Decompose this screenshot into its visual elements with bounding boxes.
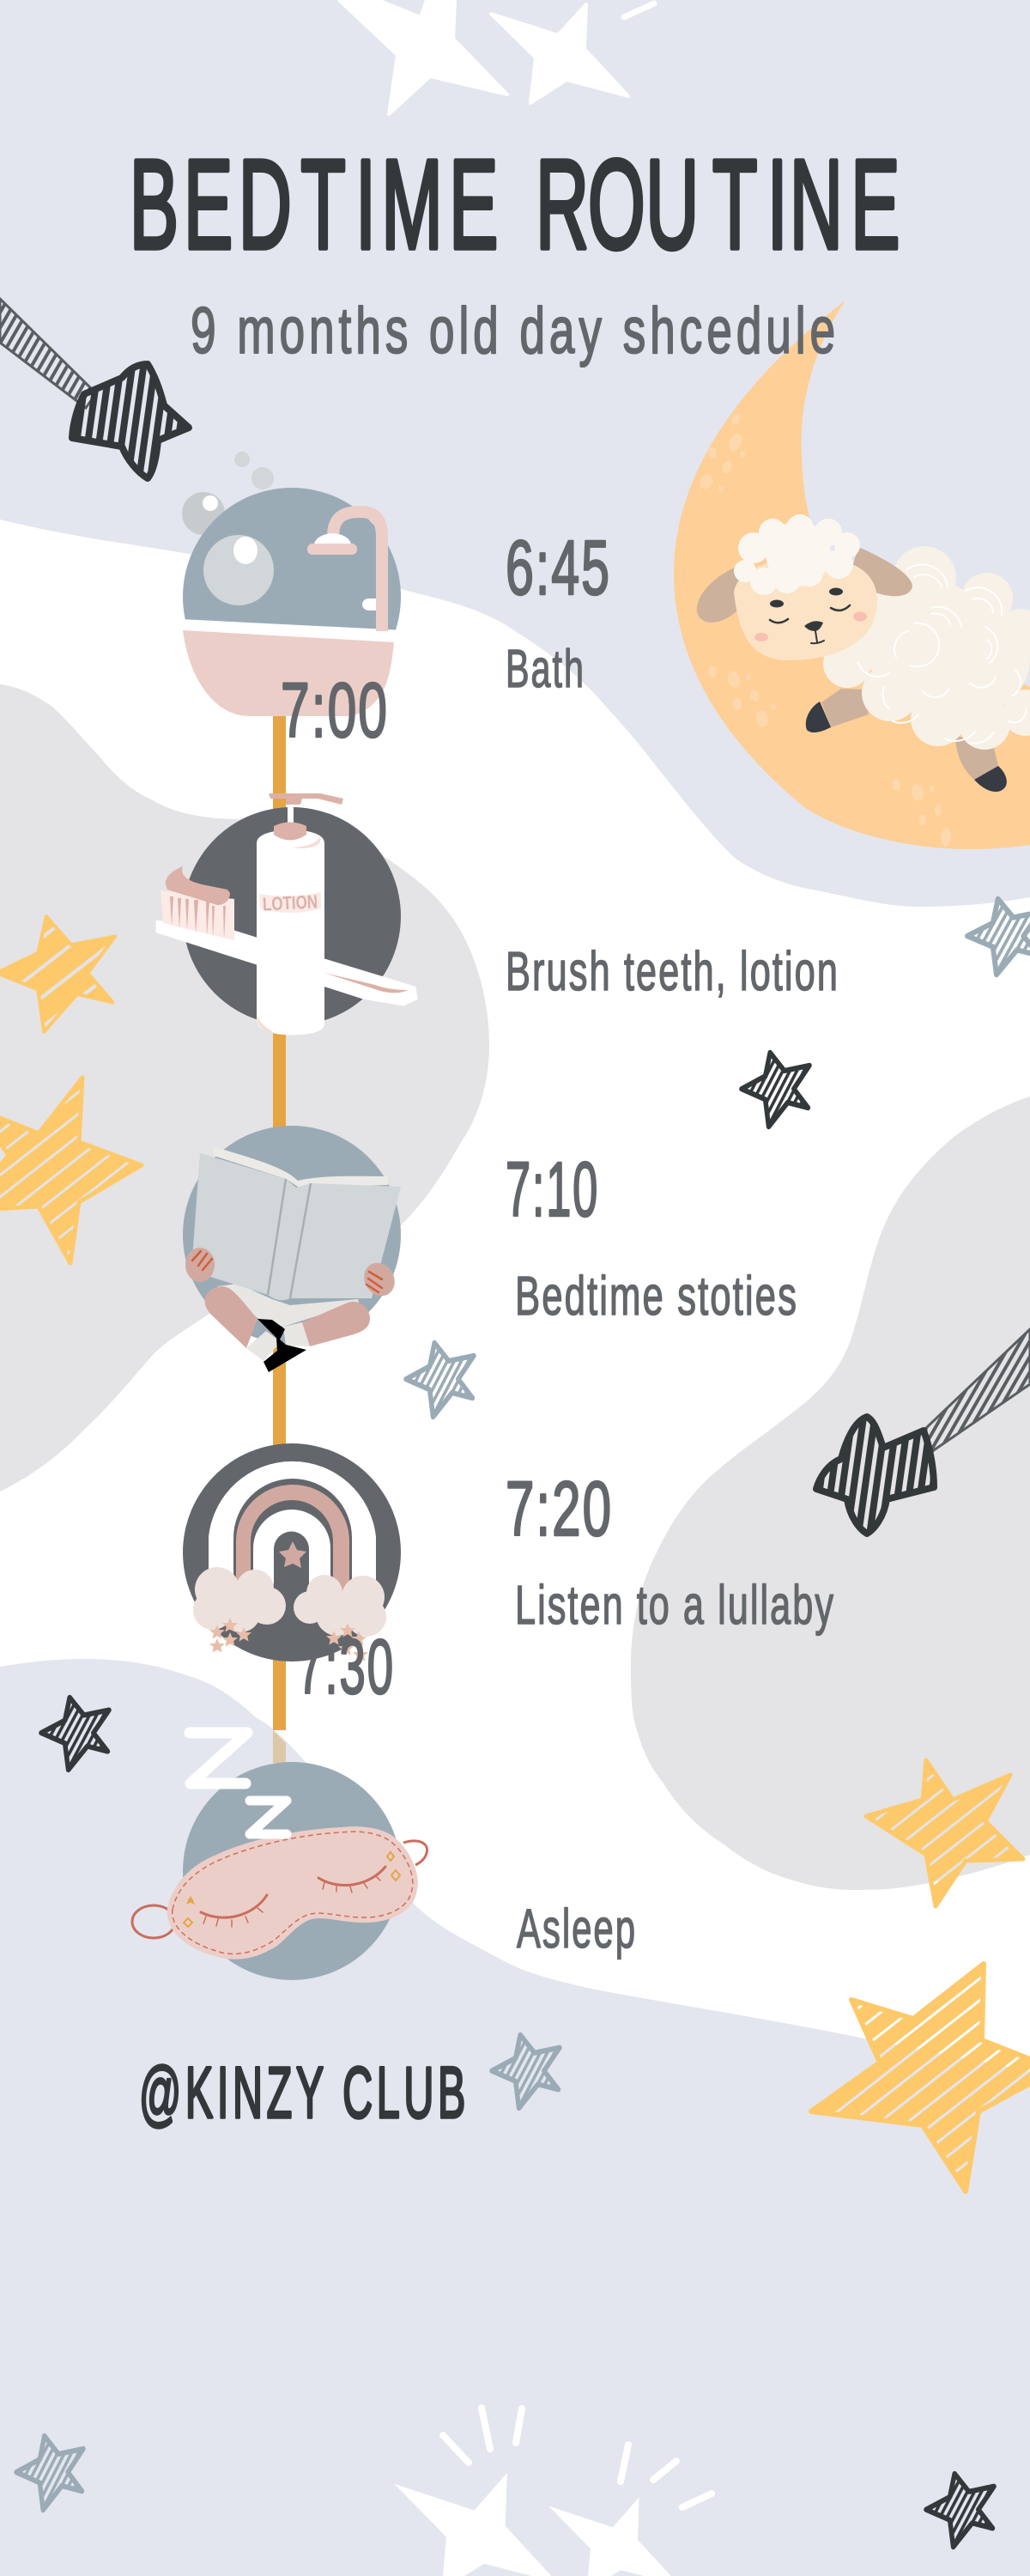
dark hatched star middle right <box>742 1053 809 1127</box>
moon with sleeping sheep <box>674 301 1030 849</box>
grey blob left <box>0 684 489 1492</box>
schedule time 7:10: 7:10 <box>506 1147 599 1233</box>
shoes <box>258 1319 306 1372</box>
sheep hooves <box>806 702 1007 792</box>
timeline connector <box>273 708 286 1763</box>
book <box>191 1146 401 1300</box>
lotion label: LOTION <box>262 890 318 915</box>
moon spots <box>698 412 951 847</box>
rainbow arches <box>209 1461 376 1592</box>
hands <box>185 1248 401 1302</box>
sheep face <box>734 558 877 660</box>
blue hatched star near handle <box>492 2035 560 2108</box>
sheep legs <box>821 689 998 780</box>
sheep right ear <box>852 547 912 596</box>
activity: bedtime stories: Bedtime stoties <box>515 1265 798 1327</box>
yellow star left large <box>0 1078 142 1263</box>
activity: bath: Bath <box>506 640 585 699</box>
toothbrush stripe <box>324 973 408 993</box>
blue hatched star right edge <box>967 899 1030 975</box>
icon: lotion and toothbrush <box>157 793 416 1035</box>
blue hatched star middle <box>406 1343 474 1417</box>
legs <box>205 1286 370 1348</box>
sheep left ear <box>697 567 753 623</box>
icon: sleep mask <box>132 1733 427 1980</box>
mask body <box>167 1826 418 1959</box>
closed eyes <box>201 1867 385 1927</box>
schedule time 7:00: 7:00 <box>281 668 389 754</box>
yellow star right large <box>811 1964 1030 2191</box>
mini stars <box>209 1618 368 1661</box>
bristles <box>161 890 234 940</box>
white stars and rays at bottom <box>394 2408 712 2576</box>
icon: rainbow <box>183 1443 401 1662</box>
wool curls <box>858 564 1026 744</box>
bottle <box>257 831 324 1035</box>
icon: child reading a book <box>183 1126 401 1372</box>
sheep body <box>823 546 1030 750</box>
handle text: @KINZY CLUB <box>139 2052 470 2133</box>
activity: asleep: Asleep <box>517 1898 637 1959</box>
bubble highlights <box>203 495 274 605</box>
yellow star right small <box>866 1760 1023 1906</box>
icon: bath <box>182 452 401 716</box>
shorts <box>217 1284 359 1327</box>
activity: lullaby: Listen to a lullaby <box>515 1574 835 1636</box>
schedule time 6:45: 6:45 <box>506 526 611 611</box>
mask gold stars <box>184 1852 400 1927</box>
tub <box>183 630 394 716</box>
wool cap <box>734 514 860 595</box>
blue circle <box>183 1762 401 1980</box>
dark hatched star left <box>41 1698 109 1770</box>
bubbles <box>182 452 274 535</box>
title: BEDTIME ROUTINE <box>130 132 900 276</box>
blue hatched star bottom left <box>16 2436 83 2510</box>
toothpaste <box>166 866 230 905</box>
schedule time 7:30: 7:30 <box>297 1625 395 1710</box>
yellow star left small <box>0 916 115 1032</box>
blue circle <box>183 1126 401 1344</box>
dark scribble star with trail, right <box>816 1329 1030 1534</box>
grey blob right <box>631 1097 1030 1890</box>
mask straps <box>132 1841 427 1938</box>
bottle highlights <box>258 837 320 1033</box>
dark scribble star with trail, top left <box>0 299 189 478</box>
toothbrush handle <box>157 921 416 1005</box>
decorative white stars top <box>339 0 654 114</box>
blue circle <box>183 488 401 630</box>
sheep eyes, nose, cheeks <box>754 587 867 643</box>
shower <box>307 512 382 631</box>
schedule time 7:20: 7:20 <box>506 1467 613 1552</box>
dark circle <box>183 807 401 1025</box>
pump <box>269 793 343 840</box>
Z letters <box>190 1733 287 1834</box>
dark circle <box>183 1443 401 1662</box>
rainbow star <box>279 1541 306 1568</box>
activity: brush teeth, lotion: Brush teeth, lotion <box>506 940 839 1002</box>
crescent moon <box>674 301 1030 849</box>
white wave band <box>0 519 1030 2071</box>
dark hatched star bottom right <box>926 2474 994 2547</box>
socks <box>246 1322 310 1361</box>
clouds <box>193 1567 386 1637</box>
stitching <box>173 1832 413 1954</box>
